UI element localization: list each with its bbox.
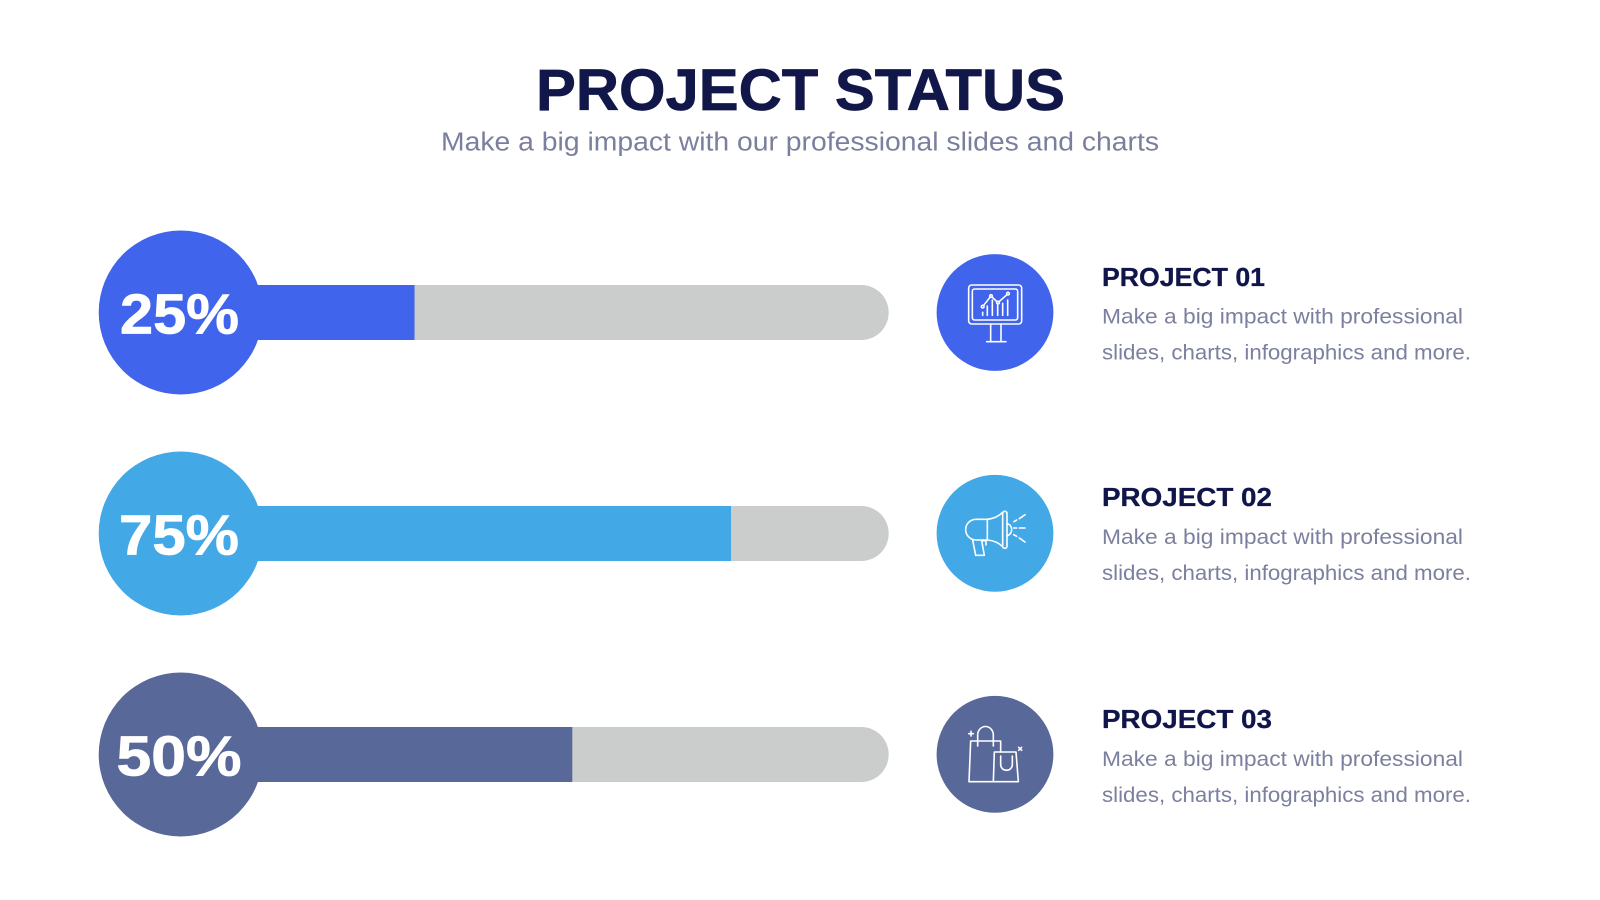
subtitle: Make a big impact with our professional slides and charts [441, 128, 1159, 156]
percentage badge [99, 452, 263, 616]
percentage badge [99, 672, 263, 836]
progress row: project 01 [99, 230, 889, 394]
progress row: project 03 [99, 672, 889, 836]
description: slides, charts, infographics and more. [1102, 342, 1471, 364]
bar fill 50% [180, 727, 572, 782]
heading: PROJECT 01 [1102, 262, 1265, 292]
percentage value: 75% [119, 504, 239, 568]
heading: PROJECT 03 [1102, 704, 1272, 734]
description: Make a big impact with professional [1102, 306, 1463, 328]
percentage badge [99, 230, 263, 394]
description: slides, charts, infographics and more. [1102, 562, 1471, 585]
icon: megaphone [937, 475, 1053, 592]
title: PROJECT STATUS [536, 58, 1065, 123]
bar fill 75% [180, 506, 731, 561]
text block: project 01 [1102, 262, 1471, 364]
progress row: project 02 [99, 452, 889, 616]
icon: presentation chart [937, 254, 1053, 371]
description: Make a big impact with professional [1102, 526, 1463, 549]
bar track [180, 727, 889, 782]
text block: project 02 [1102, 482, 1471, 585]
bar track [180, 285, 889, 340]
description: slides, charts, infographics and more. [1102, 784, 1471, 807]
heading: PROJECT 02 [1102, 482, 1272, 512]
bar fill 25% [180, 285, 414, 340]
text block: project 03 [1102, 704, 1471, 807]
percentage value: 50% [116, 724, 242, 788]
description: Make a big impact with professional [1102, 748, 1463, 771]
icon: shopping bags [937, 696, 1053, 813]
percentage value: 25% [120, 282, 239, 346]
bar track [180, 506, 889, 561]
